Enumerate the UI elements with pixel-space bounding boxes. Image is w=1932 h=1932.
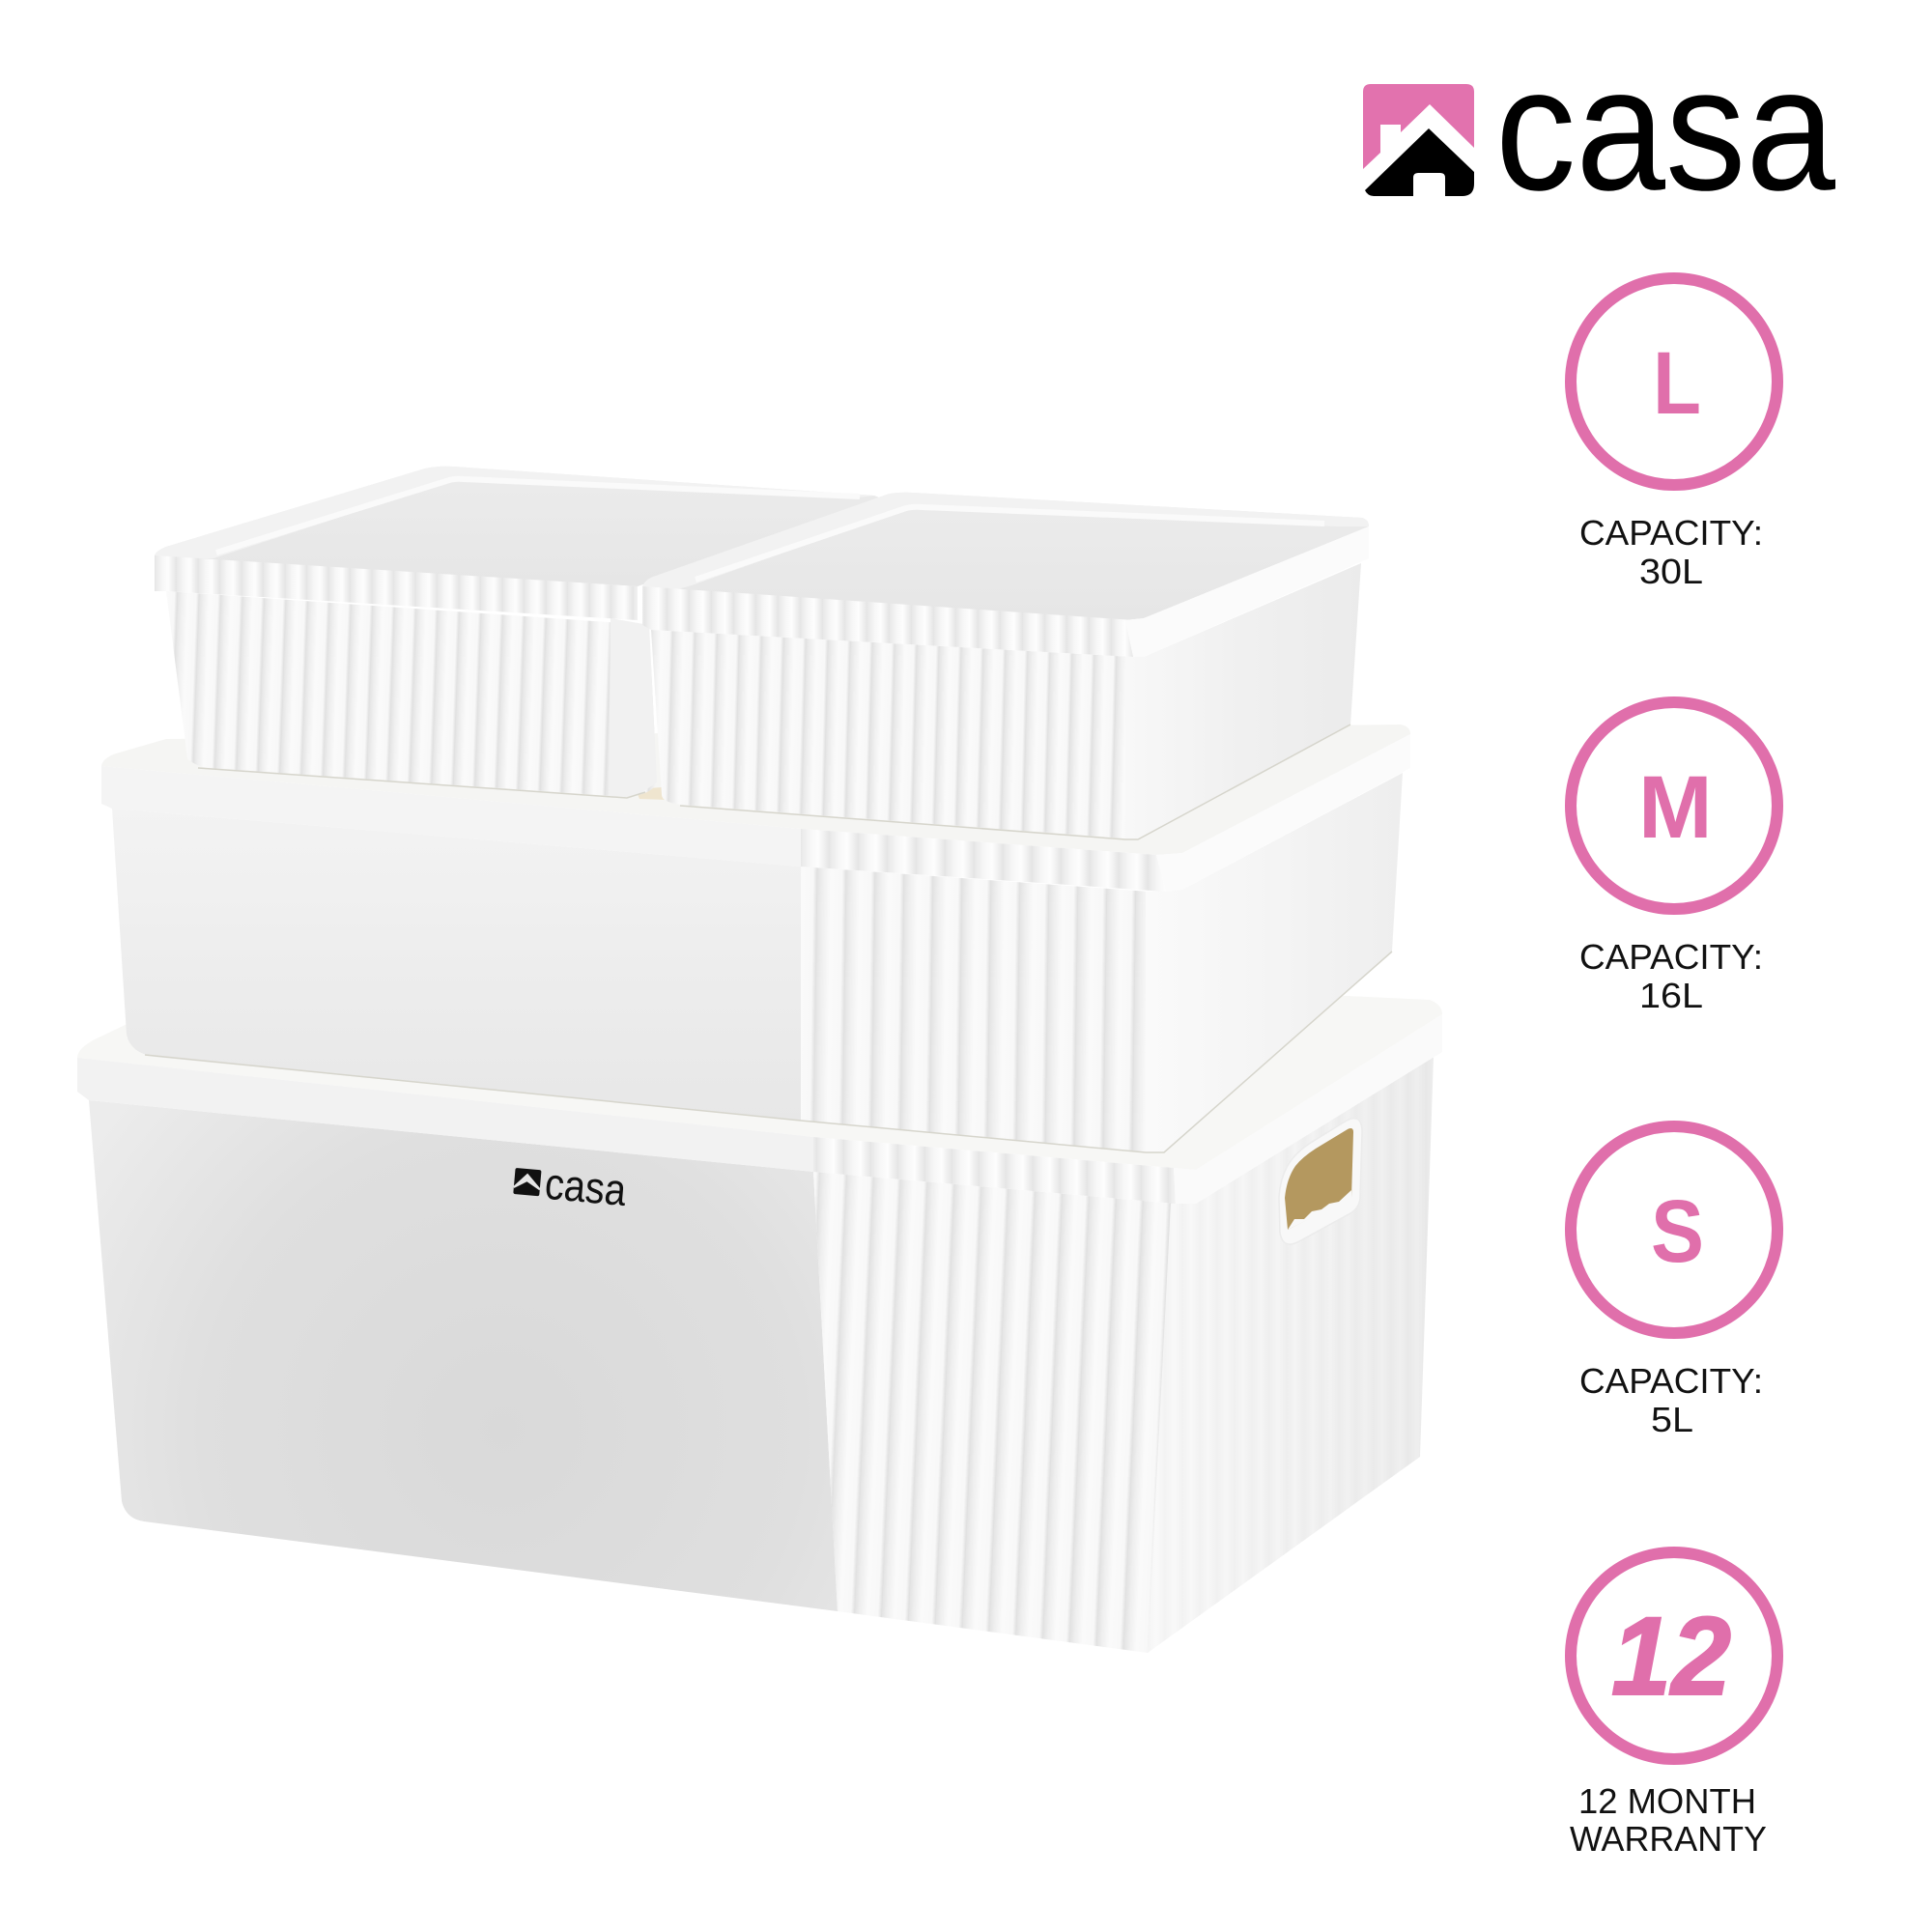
medium box bottom contact line	[145, 952, 1392, 1152]
large box lid corner	[1174, 1014, 1442, 1204]
badge: warranty	[1570, 1552, 1777, 1859]
printed logo wordmark: casa	[543, 1158, 629, 1215]
small box left lid teeth	[155, 555, 638, 620]
medium box lid band	[101, 766, 801, 867]
small box left lid rim	[155, 467, 874, 558]
capacity label: CAPACITY:	[1579, 513, 1763, 553]
small box left	[155, 467, 884, 798]
capacity label: CAPACITY:	[1579, 1361, 1763, 1401]
letter M: M	[1638, 758, 1713, 857]
large box front panel	[89, 1100, 838, 1611]
ring	[1571, 1126, 1777, 1333]
medium box side	[1146, 773, 1403, 1152]
product photo: stacked storage boxes	[77, 467, 1442, 1653]
small box left lid groove	[216, 479, 860, 553]
brand logo	[1363, 30, 1836, 227]
small box right lid teeth	[642, 586, 1133, 657]
small box right bottom contact line	[680, 724, 1350, 839]
capacity label: 16L	[1639, 976, 1703, 1015]
warranty label	[1570, 1781, 1767, 1859]
capacity label: CAPACITY:	[1579, 937, 1763, 977]
badge: small	[1571, 1126, 1777, 1439]
capacity label	[1579, 1361, 1763, 1439]
large box	[77, 947, 1442, 1653]
ring	[1571, 702, 1777, 909]
small box right lid groove	[696, 507, 1324, 580]
small box right side	[1125, 563, 1361, 838]
small box right ribbed front	[651, 630, 1133, 838]
medium box front panel	[112, 809, 801, 1121]
capacity label	[1579, 513, 1763, 591]
printed logo on large box	[512, 1155, 629, 1215]
capacity label	[1579, 937, 1763, 1015]
warranty label: 12 MONTH	[1578, 1781, 1756, 1821]
ring	[1571, 1552, 1777, 1759]
large box lid top	[77, 947, 1442, 1170]
small box right lid corner	[1125, 526, 1369, 657]
small box right lid rim	[642, 493, 1369, 592]
small box right lid top	[642, 493, 1369, 620]
small box left body	[166, 591, 657, 797]
small box right	[642, 493, 1369, 839]
logo icon: black house	[1365, 128, 1474, 196]
capacity label: 30L	[1639, 552, 1703, 591]
medium box ribbed front	[801, 867, 1150, 1152]
medium box	[101, 724, 1410, 1152]
small box left lid top	[155, 467, 884, 586]
warranty label: WARRANTY	[1570, 1819, 1767, 1859]
large box side	[1148, 1057, 1434, 1653]
logo icon: pink tile	[1363, 84, 1474, 169]
large box ribbed front	[813, 1172, 1176, 1653]
large box lid band	[77, 1058, 813, 1172]
letter S: S	[1651, 1182, 1704, 1281]
capacity label: 5L	[1651, 1400, 1693, 1439]
gap shadow tint	[636, 787, 667, 800]
small box left bottom contact line	[198, 768, 645, 798]
small box left smooth end	[609, 618, 657, 797]
medium box lid teeth	[801, 829, 1166, 892]
large box lid teeth	[813, 1137, 1176, 1204]
medium box lid top	[101, 724, 1410, 855]
handle cutout	[1279, 1119, 1362, 1244]
medium box lid corner	[1156, 734, 1410, 892]
logo wordmark: casa	[1495, 30, 1836, 227]
letter L: L	[1653, 334, 1701, 433]
badge: large	[1571, 278, 1777, 591]
number 12: 12	[1611, 1595, 1731, 1719]
badge: medium	[1571, 702, 1777, 1015]
ring	[1571, 278, 1777, 485]
printed logo icon	[513, 1168, 542, 1196]
